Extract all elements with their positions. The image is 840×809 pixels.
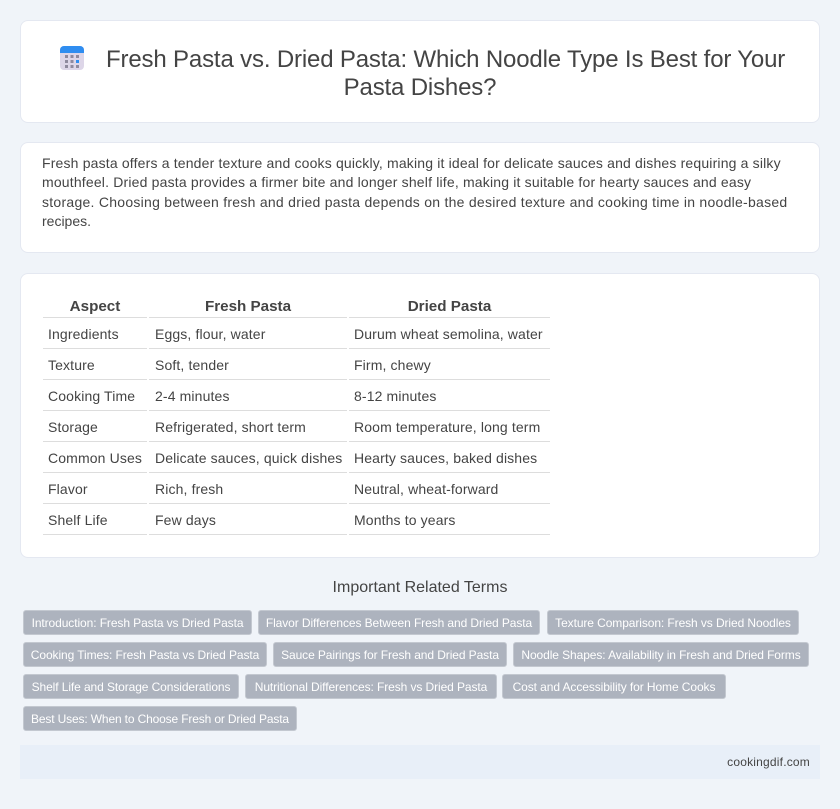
related terms tags: Flavor Differences Between Fresh and Dried Pasta [266,616,532,630]
comparison table: Common Uses [48,450,142,466]
intro text: mouthfeel. Dried pasta provides a firmer bite and longer shelf life, making it suitable for hearty sauces and easy [42,174,751,190]
comparison table: Refrigerated, short term [155,419,306,435]
comparison table panel [20,273,820,558]
comparison table: Neutral, wheat-forward [354,481,498,497]
related terms tags [23,610,809,731]
title [106,46,785,101]
footer source: cookingdif.com [727,755,810,769]
comparison table: Flavor [48,481,88,497]
comparison table [43,298,550,535]
comparison table: Room temperature, long term [354,419,540,435]
title: Pasta Dishes? [344,74,496,101]
comparison table: Soft, tender [155,357,229,373]
related terms heading: Important Related Terms [333,579,507,596]
intro text: storage. Choosing between fresh and dried pasta depends on the desired texture and cooking time in noodle-based [42,194,787,210]
related terms tags: Noodle Shapes: Availability in Fresh and Dried Forms [521,648,801,662]
comparison table: Few days [155,512,216,528]
related terms tags: Sauce Pairings for Fresh and Dried Pasta [281,648,499,662]
comparison table: Durum wheat semolina, water [354,326,543,342]
comparison table: Firm, chewy [354,357,431,373]
related terms tags: Cooking Times: Fresh Pasta vs Dried Pasta [31,648,259,662]
comparison table: Months to years [354,512,456,528]
comparison table: Fresh Pasta [205,298,291,315]
related terms tags: Texture Comparison: Fresh vs Dried Noodles [555,616,791,630]
intro panel [20,142,820,253]
related terms tags: Introduction: Fresh Pasta vs Dried Pasta [32,616,243,630]
intro text: Fresh pasta offers a tender texture and cooks quickly, making it ideal for delicate sauces and dishes requiring a silky [42,155,781,171]
intro text: recipes. [42,213,91,229]
related terms tags: Nutritional Differences: Fresh vs Dried Pasta [255,680,487,694]
intro text [42,155,787,229]
comparison table: Cooking Time [48,388,135,404]
related terms tags: Cost and Accessibility for Home Cooks [513,680,715,694]
comparison table: Texture [48,357,95,373]
comparison table: Rich, fresh [155,481,223,497]
comparison table: Ingredients [48,326,119,342]
comparison table: Eggs, flour, water [155,326,266,342]
related terms tags: Best Uses: When to Choose Fresh or Dried Pasta [31,712,289,726]
comparison table: 2-4 minutes [155,388,230,404]
comparison table: Dried Pasta [408,298,491,315]
footer bar [20,745,820,779]
comparison table: Delicate sauces, quick dishes [155,450,342,466]
comparison table: 8-12 minutes [354,388,436,404]
comparison table: Hearty sauces, baked dishes [354,450,537,466]
title: Fresh Pasta vs. Dried Pasta: Which Noodle Type Is Best for Your [106,46,785,73]
icon: calendar [60,46,84,70]
related terms tags: Shelf Life and Storage Considerations [32,680,230,694]
comparison table: Shelf Life [48,512,108,528]
comparison table: Storage [48,419,98,435]
header panel [20,20,820,123]
comparison table: Aspect [70,298,120,315]
